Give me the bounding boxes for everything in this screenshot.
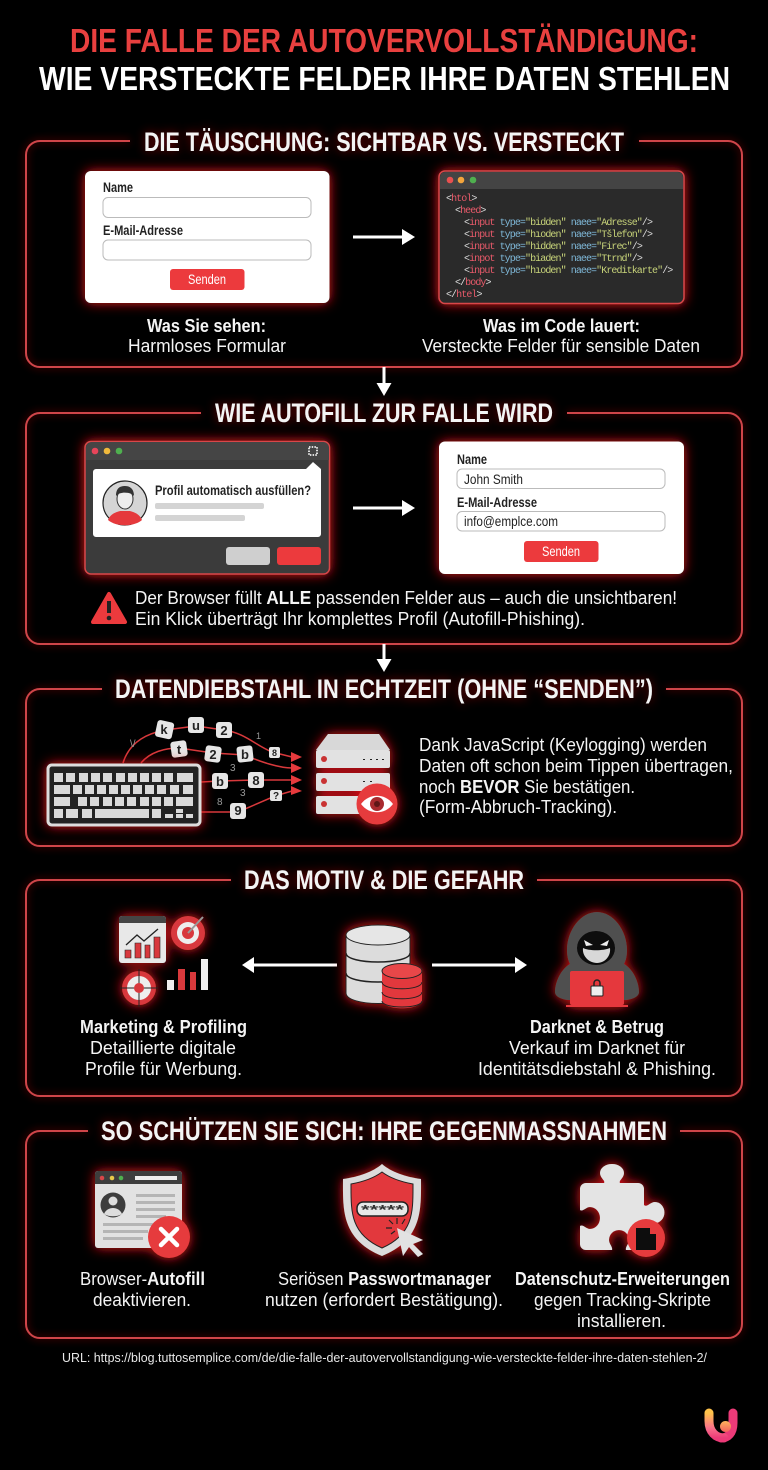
text: keylogging: noch BEVOR Sie bestätigen.: [419, 776, 635, 797]
icon: shield with password: *****: [361, 1202, 406, 1217]
flying key caps: 2: [209, 747, 217, 762]
text: darknet: Darknet & Betrug: [530, 1016, 664, 1037]
heading: Autofill: WIE AUTOFILL ZUR FALLE WIRD: [215, 398, 553, 428]
warning text: Der Browser füllt ALLE passenden Felder aus – auch die unsichtbaren!: [135, 587, 677, 608]
text: darknet: Identitätsdiebstahl & Phishing.: [478, 1058, 716, 1079]
arrow: to marketing: [242, 957, 337, 973]
arrow: form to code: [353, 229, 415, 245]
filled form card: John Smith: [464, 472, 523, 487]
text: keylogging: (Form-Abbruch-Tracking).: [419, 796, 617, 817]
text: passwortmanager: [265, 1268, 503, 1310]
icon: shield with password: [343, 1164, 423, 1257]
text: autofill: [80, 1268, 205, 1310]
empty form card: [85, 171, 330, 303]
title: [39, 22, 730, 97]
arrow: connector one: [376, 367, 392, 396]
flying key caps: 1: [256, 731, 261, 741]
text: erweiterungen: [515, 1268, 730, 1331]
filled form card: Name: [457, 452, 487, 467]
heading: Motiv: DAS MOTIV & DIE GEFAHR: [244, 865, 524, 895]
heading: die Täuschung: DIE TÄUSCHUNG: SICHTBAR VS. VERSTECKT: [144, 127, 624, 157]
flying key caps: ?: [273, 791, 279, 802]
flying key caps: \/: [130, 739, 136, 750]
flying key caps: 8: [252, 773, 260, 788]
icon: browser with cross: [95, 1171, 190, 1258]
icon: warning triangle: [93, 594, 125, 622]
browser autofill prompt: [85, 442, 330, 574]
code window: <input type="hıoden" naee="Kreditkarte"/>: [464, 265, 673, 277]
text: marketing: Profile für Werbung.: [85, 1058, 242, 1079]
caption: hidden code: [422, 315, 700, 356]
panel: Motiv und Gefahr: [26, 865, 742, 1096]
code window: </htel>: [446, 289, 482, 301]
caption: hidden code: Was im Code lauert:: [483, 315, 640, 336]
filled form card: [439, 442, 684, 574]
flying key caps: u: [192, 718, 200, 733]
empty form card: E-Mail-Adresse: [103, 223, 183, 238]
source url: URL: https://blog.tuttosemplice.com/de/die-falle-der-autovervollstandigung-wie-versteckte-felder-ihre-daten-stehlen-2/: [62, 1350, 707, 1365]
text: darknet: Verkauf im Darknet für: [509, 1037, 685, 1058]
avatar: [103, 481, 147, 525]
heading: Datendiebstahl: DATENDIEBSTAHL IN ECHTZEIT (OHNE “SENDEN”): [115, 674, 653, 704]
icon: keyboard: [48, 765, 200, 825]
text: keylogging: [419, 734, 733, 817]
warning text: Ein Klick überträgt Ihr komplettes Profil (Autofill-Phishing).: [135, 608, 585, 629]
code window: <heed>: [455, 205, 486, 217]
warning text: [135, 587, 677, 629]
icon: marketing charts: [119, 916, 208, 1007]
arrow: prompt to filled form: [353, 500, 415, 516]
flying key caps: 8: [272, 748, 277, 758]
code window: [439, 171, 684, 304]
text: passwortmanager: nutzen (erfordert Bestätigung).: [265, 1289, 503, 1310]
empty form card: Senden: [188, 271, 226, 287]
flying key caps: 3: [230, 763, 236, 774]
filled form card: Senden: [542, 543, 580, 559]
text: darknet: [478, 1016, 716, 1079]
icon: database: [346, 925, 422, 1008]
flying key caps: 2: [220, 723, 228, 738]
text: marketing: Detaillierte digitale: [90, 1037, 236, 1058]
caption: visible form: Harmloses Formular: [128, 335, 286, 356]
empty form card: Name: [103, 180, 133, 195]
filled form card: E-Mail-Adresse: [457, 495, 537, 510]
flying key caps: t: [177, 742, 182, 757]
flying key caps: b: [216, 774, 224, 789]
text: erweiterungen: gegen Tracking-Skripte: [534, 1289, 711, 1310]
panel: Schutzmaßnahmen: [26, 1116, 742, 1338]
flying key caps: [130, 717, 282, 819]
text: autofill: Browser-Autofill: [80, 1268, 205, 1289]
browser autofill prompt: Profil automatisch ausfüllen?: [155, 482, 311, 498]
text: passwortmanager: Seriösen Passwortmanager: [278, 1268, 491, 1289]
icon: hacker with laptop: [555, 912, 639, 1007]
text: keylogging: Dank JavaScript (Keylogging) werden: [419, 734, 707, 755]
flying key caps: b: [241, 747, 249, 762]
text: marketing: Marketing & Profiling: [80, 1016, 247, 1037]
icon: server with eye: [316, 734, 398, 824]
icon: puzzle with blocker: [580, 1164, 665, 1257]
panel: die Täuschung: [26, 127, 742, 367]
code window: <input type="hidden" naee="Firec"/>: [464, 241, 643, 253]
caption: visible form: [128, 315, 286, 356]
panel: Datendiebstahl: [26, 674, 742, 846]
flying key caps: k: [160, 722, 168, 737]
logo: [709, 1413, 733, 1438]
keystroke paths: [123, 726, 292, 812]
code window: <inpot type="biaden" naee="Ttrnd"/>: [464, 253, 643, 265]
text: keylogging: Daten oft schon beim Tippen übertragen,: [419, 755, 733, 776]
flying key caps: 9: [234, 803, 242, 818]
arrow: to darknet: [432, 957, 527, 973]
text: autofill: deaktivieren.: [93, 1289, 191, 1310]
flying key caps: 3: [240, 788, 246, 799]
arrowheads: [291, 752, 302, 795]
text: marketing: [80, 1016, 247, 1079]
code window: <htol>: [446, 193, 477, 205]
caption: visible form: Was Sie sehen:: [147, 315, 266, 336]
text: erweiterungen: installieren.: [577, 1310, 666, 1331]
panel: wie Autofill zur Falle wird: [26, 398, 742, 644]
code window: <input type="bidden" naee="Adresse"/>: [464, 217, 653, 229]
arrow: connector two: [376, 644, 392, 672]
filled form card: info@emplce.com: [464, 514, 558, 529]
code window: <input type="hıoden" naee="Tšlefon"/>: [464, 229, 653, 241]
caption: hidden code: Versteckte Felder für sensible Daten: [422, 335, 700, 356]
flying key caps: 8: [217, 797, 223, 808]
text: erweiterungen: Datenschutz-Erweiterungen: [515, 1268, 730, 1289]
code window: </body>: [455, 277, 492, 289]
